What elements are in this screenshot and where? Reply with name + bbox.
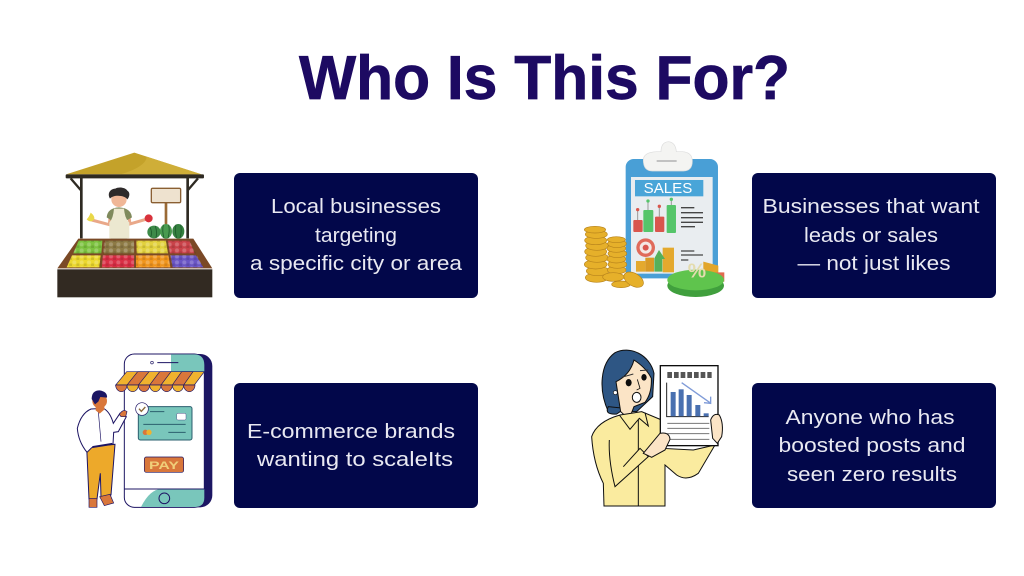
panel: leads or sales: Businesses that want [762, 195, 980, 218]
watermelons [147, 226, 161, 238]
pie [703, 262, 718, 273]
panel: boosted posts: boosted posts and [778, 434, 966, 457]
pay button: PAY [149, 460, 180, 472]
report sheet [660, 366, 718, 446]
icon: sales clipboard with coins [584, 142, 724, 297]
card [138, 407, 192, 440]
icon: sales clipboard with coins: SALES [644, 181, 692, 197]
produce tray [57, 239, 212, 268]
icon: sales clipboard with coins: % [688, 260, 706, 283]
icon: market stall [57, 153, 212, 297]
sign [162, 202, 170, 227]
panel: boosted posts: seen zero results [787, 463, 957, 486]
panel: local businesses [234, 173, 478, 298]
panel: local businesses: a specific city or area [250, 252, 463, 275]
icon: worried woman with falling chart [592, 350, 722, 506]
panel: leads or sales: leads or sales [804, 224, 938, 247]
coins [584, 226, 646, 290]
panel: local businesses: targeting [315, 224, 397, 247]
awning [116, 372, 204, 385]
panel: boosted posts: Anyone who has [786, 406, 954, 429]
pay button [144, 457, 184, 472]
vendor [92, 212, 111, 225]
target and bars [636, 238, 655, 257]
panel: boosted posts [752, 383, 996, 508]
title: Who Is This For? [299, 44, 790, 113]
panel: local businesses: Local businesses [271, 195, 441, 218]
panel: e-commerce brands: E-commerce brands [247, 420, 455, 443]
icon: phone payment [77, 354, 212, 507]
panel: leads or sales [752, 173, 996, 298]
candlesticks [638, 200, 671, 222]
panel: e-commerce brands: wanting to scaleIts [256, 448, 453, 471]
panel: e-commerce brands [234, 383, 478, 508]
man [87, 444, 115, 499]
panel: leads or sales: — not just likes [798, 252, 950, 275]
